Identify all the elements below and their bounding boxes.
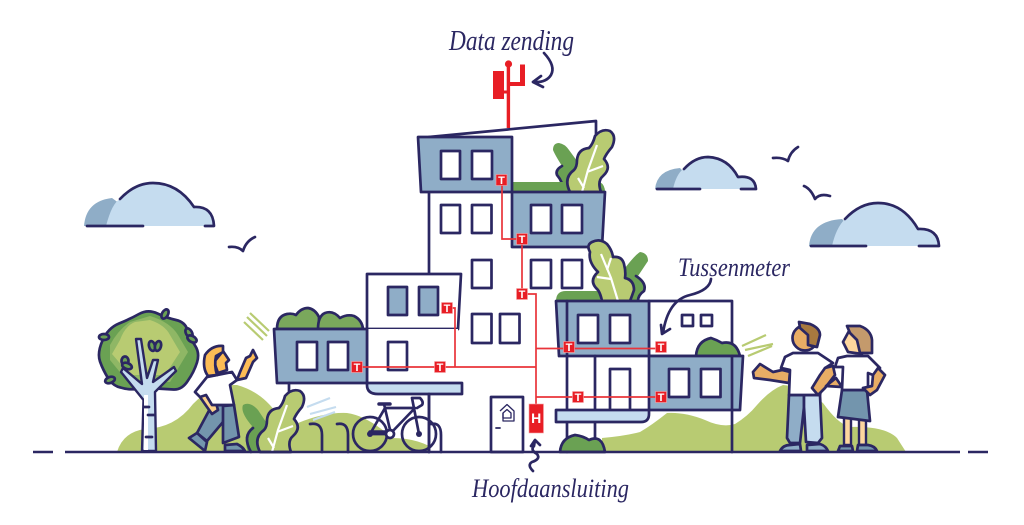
meter T 2	[516, 234, 528, 246]
meter T 1	[496, 174, 507, 187]
shirt	[781, 353, 833, 395]
meter T 4	[442, 302, 452, 315]
wall lines	[428, 192, 430, 452]
face	[214, 351, 229, 373]
extended arm	[753, 364, 790, 383]
left blue module	[274, 329, 367, 383]
meter T 10: T	[658, 392, 665, 404]
pole under balcony	[289, 383, 429, 452]
meter H: main connection: H	[531, 410, 541, 426]
hair	[204, 346, 223, 376]
trunk marks	[144, 407, 154, 437]
bush on left blue module	[277, 308, 363, 329]
arrow: tussenmeter	[661, 279, 711, 334]
meter T 3: T	[519, 289, 526, 301]
lower right blue module	[649, 356, 743, 410]
tree mid tone	[110, 316, 188, 382]
meter T 1: T	[498, 175, 505, 187]
plant: right dark leaf	[610, 252, 648, 301]
meter H: main connection	[529, 404, 544, 433]
birds	[229, 147, 830, 251]
man's hand behind	[826, 378, 842, 387]
tree trunk and branches	[121, 339, 176, 451]
meter T 9	[572, 392, 584, 404]
left leg	[787, 395, 804, 443]
bicycle	[353, 398, 436, 451]
shoes	[189, 433, 207, 451]
right balcony	[556, 410, 649, 422]
meter T 7: T	[566, 342, 573, 354]
plant: light leaf left	[257, 390, 304, 452]
red connection lines	[357, 180, 661, 404]
plant: dark leaf left	[242, 404, 268, 452]
tower building wall	[429, 192, 512, 452]
meter T 2: T	[519, 234, 526, 246]
tree	[99, 308, 198, 451]
shoes	[780, 444, 801, 451]
left balcony	[367, 383, 462, 394]
meter T 8	[656, 342, 666, 354]
right white module	[649, 301, 732, 356]
meter T 6	[434, 362, 446, 374]
arrow: hoofdaansluiting	[530, 440, 540, 471]
legs	[844, 416, 866, 445]
person: man	[753, 322, 835, 451]
raised arm and hand	[237, 350, 257, 380]
skirt	[838, 390, 870, 421]
lower right section	[567, 356, 732, 452]
door	[491, 397, 523, 452]
trunk highlight	[144, 395, 148, 450]
motion lines blue	[307, 398, 336, 420]
cloud middle	[655, 157, 757, 189]
folded arm	[812, 366, 835, 395]
meter T 5	[352, 362, 362, 374]
bike racks	[310, 424, 441, 452]
arm on hip	[863, 368, 885, 395]
hair	[799, 322, 820, 347]
right leg	[804, 395, 822, 443]
label: Tussenmeter: Tussenmeter	[678, 253, 791, 282]
meter T 3	[516, 288, 528, 301]
meter T 10	[656, 392, 666, 404]
plant: dark leaf left outline	[247, 428, 253, 452]
meter T 5: T	[354, 362, 361, 374]
windows tower	[441, 205, 582, 343]
label: Data zending: Data zending	[448, 26, 574, 57]
back leg	[197, 405, 226, 441]
tree small leaves	[99, 308, 198, 385]
hills: right	[602, 385, 906, 452]
motion lines green right	[742, 335, 773, 356]
meter T 8: T	[658, 342, 665, 354]
plant: light leaf top	[567, 130, 614, 192]
face	[843, 331, 862, 354]
top left blue module	[418, 137, 512, 192]
tree highlight	[112, 320, 180, 375]
label: Hoofdaansluiting: Hoofdaansluiting	[471, 474, 629, 503]
meter T 6: T	[437, 362, 444, 374]
plant: dark leaf top	[553, 143, 585, 192]
hills: left	[117, 385, 439, 452]
person: left walker	[189, 346, 257, 451]
plant: light leaf right	[588, 240, 634, 301]
icon: house on door	[500, 404, 514, 421]
right blue module	[556, 301, 649, 356]
bush at ground	[560, 435, 605, 452]
roof line	[429, 121, 596, 137]
meter T 7	[564, 342, 574, 354]
shirt	[835, 356, 880, 390]
tree crown	[99, 311, 198, 390]
green roof strip top	[512, 182, 605, 192]
shirt	[195, 372, 237, 405]
hanging arm	[200, 393, 218, 414]
cloud right	[809, 203, 940, 246]
left white lower wall	[367, 329, 458, 383]
shoes	[838, 446, 853, 451]
hair	[847, 326, 872, 353]
person: woman	[826, 326, 885, 451]
motion lines green left	[244, 313, 269, 340]
cloud left	[84, 183, 215, 226]
left upper white module	[367, 274, 461, 329]
meter T 4: T	[444, 303, 451, 315]
meter T 9: T	[575, 392, 582, 404]
front leg	[223, 405, 239, 443]
top right blue module	[512, 192, 605, 247]
bush on right blue module	[696, 338, 740, 356]
head	[792, 326, 818, 350]
antenna	[493, 60, 525, 128]
green roof strip right	[556, 291, 600, 301]
arrow: data zending	[533, 53, 552, 87]
ground line	[33, 451, 988, 453]
